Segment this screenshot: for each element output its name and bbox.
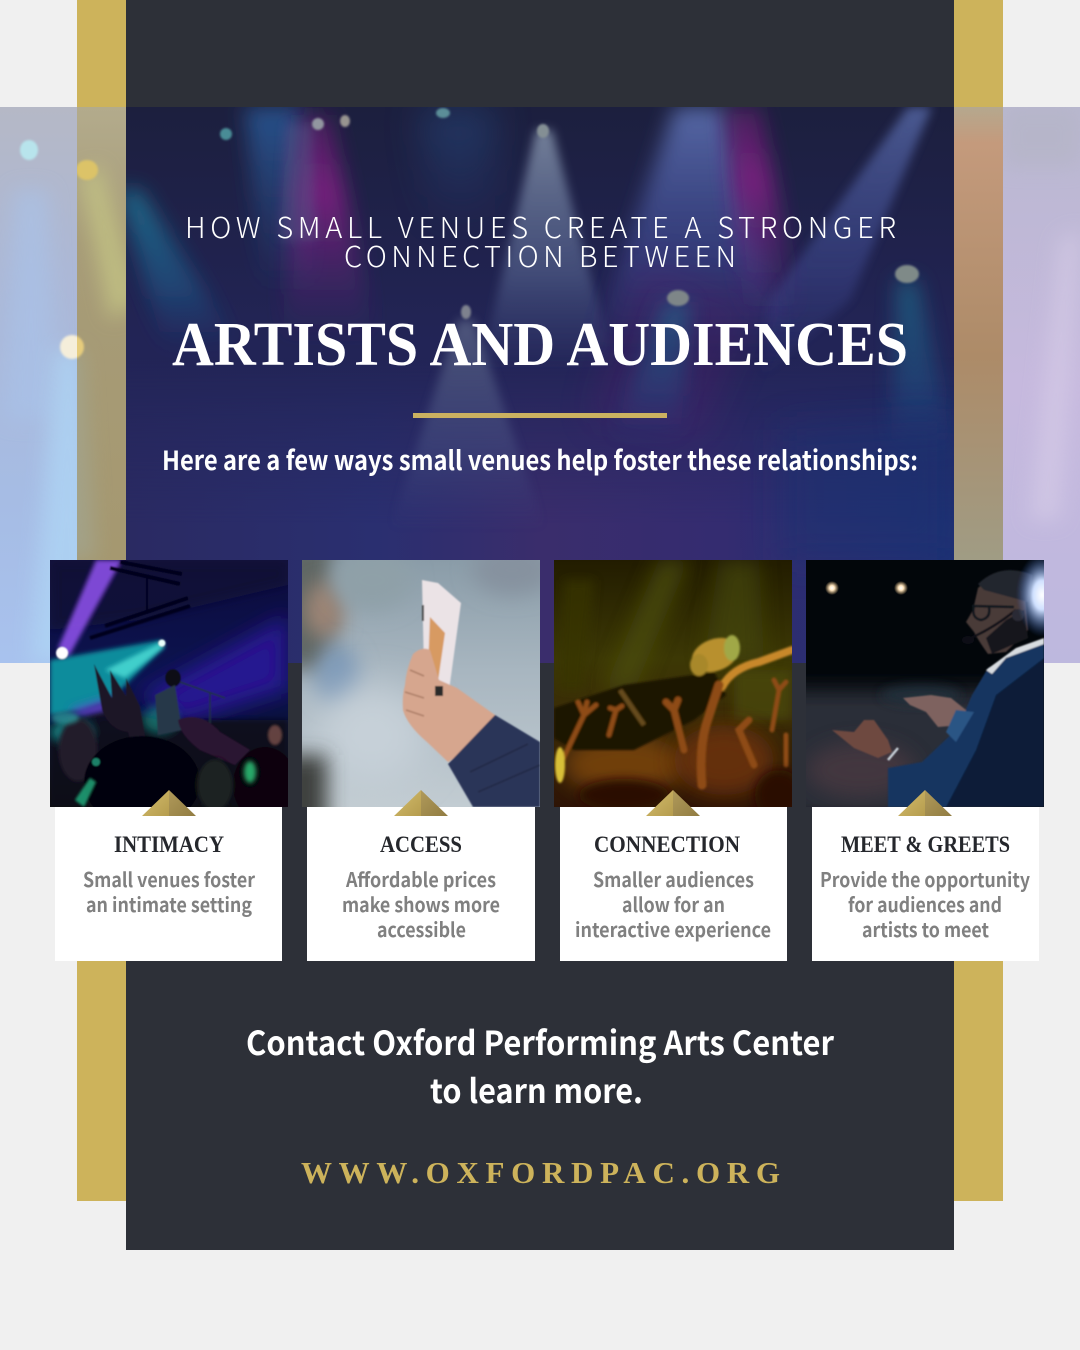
text card (812, 807, 1039, 961)
card 4: meet and greets (786, 553, 1068, 961)
contact message: Contact Oxford Performing Arts Center (246, 1017, 835, 1065)
card description: an intimate setting (86, 889, 252, 918)
left light strip (0, 107, 77, 663)
card description: Smaller audiences (593, 864, 754, 893)
title block (162, 205, 918, 478)
card heading: CONNECTION (594, 832, 740, 857)
light beams (118, 107, 955, 560)
card heading: MEET & GREETS (841, 832, 1010, 857)
subtitle: CONNECTION BETWEEN (344, 234, 736, 276)
intro sentence: Here are a few ways small venues help foster these relationships: (162, 439, 918, 478)
gold divider (413, 413, 667, 418)
hand (403, 649, 495, 762)
card description: interactive experience (575, 914, 771, 943)
left gold strip (77, 107, 126, 560)
gold backing panel (77, 0, 1003, 1201)
contact message: to learn more. (430, 1065, 643, 1113)
card description (83, 864, 255, 918)
dark backing panel (126, 0, 954, 1250)
headset (966, 610, 1016, 640)
glasses (972, 606, 1014, 620)
icon: gold pyramid (898, 790, 952, 816)
main heading: ARTISTS AND AUDIENCES (172, 311, 908, 379)
head (966, 579, 1028, 654)
text card (55, 807, 282, 961)
photo: concert with teal and purple lights (50, 560, 288, 807)
icon: gold pyramid (646, 790, 700, 816)
card heading: INTIMACY (114, 832, 224, 857)
card 3: connection (554, 560, 803, 961)
card description: allow for an (622, 889, 725, 918)
card description: artists to meet (862, 914, 990, 943)
card description (820, 864, 1030, 943)
card heading: ACCESS (380, 832, 462, 857)
sleeve (448, 715, 540, 807)
raised hand (94, 664, 146, 746)
hero stage photo band (0, 107, 1080, 663)
photo: crowd surfer (554, 560, 792, 807)
raised hands (558, 680, 786, 785)
card 2: access (282, 540, 552, 961)
card description: make shows more (342, 889, 500, 918)
icon: gold pyramid (142, 790, 196, 816)
lower hand (832, 720, 892, 758)
call to action (246, 1017, 835, 1190)
crowd surfer body (554, 672, 726, 750)
text card (307, 807, 535, 961)
card description: for audiences and (848, 889, 1002, 918)
website: WWW.OXFORDPAC.ORG (301, 1155, 780, 1190)
card 1: intimacy (50, 560, 297, 961)
card description (575, 864, 771, 943)
suit (888, 642, 1044, 807)
card description: Small venues foster (83, 864, 255, 893)
right gold strip (954, 107, 1003, 560)
text card (560, 807, 787, 961)
contact message (246, 1017, 835, 1113)
photo: hand holding tickets (302, 560, 540, 807)
card description: accessible (377, 914, 466, 943)
tickets (422, 580, 461, 720)
subtitle (185, 205, 896, 276)
icon: gold pyramid (394, 790, 448, 816)
upper hand (903, 695, 966, 727)
right light strip (1003, 107, 1080, 663)
card description: Affordable prices (345, 864, 496, 893)
collar (986, 638, 1044, 674)
centre stage lights (126, 107, 954, 663)
card description: Provide the opportunity (820, 864, 1030, 893)
stage glow (1016, 553, 1068, 637)
photo: speaker on stage (806, 560, 1044, 807)
subtitle: HOW SMALL VENUES CREATE A STRONGER (185, 205, 896, 247)
card description (342, 864, 500, 943)
stage lamps (220, 108, 919, 319)
